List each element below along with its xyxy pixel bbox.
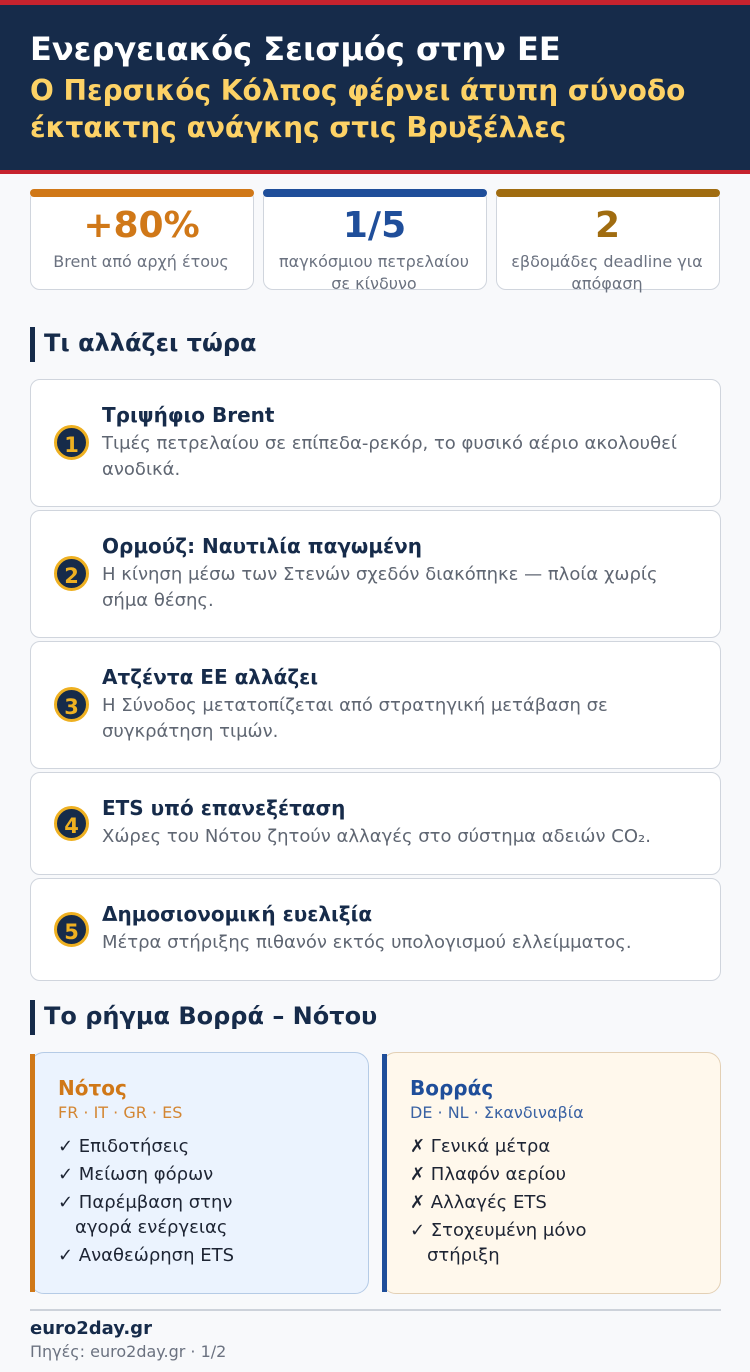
North list (410, 1136, 586, 1266)
icon: number 1: 1 (64, 433, 79, 457)
stat card: global oil: παγκόσμιου πετρελαίου (279, 252, 469, 271)
panel: South (30, 1052, 369, 1294)
step 5 heading: Δημοσιονομική ευελιξία (102, 902, 372, 926)
stat card: Brent: Brent από αρχή έτους (53, 252, 229, 271)
step 1 (30, 379, 721, 507)
North heading: Βορράς (410, 1076, 493, 1100)
icon: number 2 (54, 556, 89, 591)
stat card: global oil (263, 189, 487, 290)
icon: number 5: 5 (64, 920, 79, 944)
footer brand: euro2day.gr (30, 1318, 152, 1339)
icon: number 4: 4 (64, 814, 79, 838)
South heading: Νότος (58, 1076, 127, 1100)
step 5 text: Μέτρα στήριξης πιθανόν εκτός υπολογισμού ελλείμματος. (102, 932, 632, 953)
South list: ✓ Παρέμβαση στην (58, 1192, 232, 1213)
subtitle: Ο Περσικός Κόλπος φέρνει άτυπη σύνοδο (30, 74, 685, 107)
stat card: deadline: απόφαση (571, 274, 643, 293)
stat card: deadline: εβδομάδες deadline για (511, 252, 703, 271)
icon: number 1 (54, 425, 89, 460)
step 4 heading: ETS υπό επανεξέταση (102, 796, 345, 820)
step 1 heading: Τριψήφιο Brent (102, 403, 274, 427)
step 4 text: Χώρες του Νότου ζητούν αλλαγές στο σύστημα αδειών CO₂. (102, 826, 651, 847)
panel: North (382, 1052, 721, 1294)
step 2 heading: Ορμούζ: Ναυτιλία παγωμένη (102, 534, 422, 558)
icon: number 4 (54, 806, 89, 841)
North list: στήριξη (427, 1245, 500, 1266)
South countries: FR · IT · GR · ES (58, 1103, 182, 1122)
step 3 text (102, 695, 608, 742)
step 3 heading: Ατζέντα ΕΕ αλλάζει (102, 665, 318, 689)
North list: ✓ Στοχευμένη μόνο (410, 1220, 586, 1241)
section heading: north-south rift: Το ρήγμα Βορρά – Νότου (44, 1002, 377, 1030)
step 1 text: Τιμές πετρελαίου σε επίπεδα-ρεκόρ, το φυσικό αέριο ακολουθεί (102, 433, 677, 454)
subtitle: έκτακτης ανάγκης στις Βρυξέλλες (30, 111, 566, 144)
step 2 (30, 510, 721, 638)
South list: αγορά ενέργειας (75, 1217, 227, 1238)
step 4 (30, 772, 721, 875)
icon: number 3: 3 (64, 695, 79, 719)
South list: ✓ Επιδοτήσεις (58, 1136, 189, 1157)
footer (30, 1318, 226, 1361)
step 2 text: Η κίνηση μέσω των Στενών σχεδόν διακόπηκε — πλοία χωρίς (102, 564, 658, 585)
step 3 (30, 641, 721, 769)
step 2 text (102, 564, 658, 611)
South list: ✓ Αναθεώρηση ETS (58, 1245, 234, 1266)
stat card: deadline: 2 (595, 205, 620, 246)
icon: number 2: 2 (64, 564, 79, 588)
North list: ✗ Αλλαγές ETS (410, 1192, 547, 1213)
icon: number 5 (54, 912, 89, 947)
stat card: Brent (30, 189, 254, 290)
stat card: global oil: σε κίνδυνο (331, 274, 417, 293)
section heading: what changes (30, 327, 430, 362)
title: Ενεργειακός Σεισμός στην ΕΕ (30, 30, 561, 68)
step 2 text: σήμα θέσης. (102, 590, 214, 611)
stat card: global oil: 1/5 (343, 205, 406, 246)
section heading: what changes: Τι αλλάζει τώρα (44, 329, 257, 357)
step 1 text (102, 433, 677, 480)
section heading: north-south rift (30, 1000, 430, 1035)
North list: ✗ Πλαφόν αερίου (410, 1164, 566, 1185)
stat card: Brent: +80% (83, 205, 200, 246)
step 3 text: συγκράτηση τιμών. (102, 721, 278, 742)
South list (58, 1136, 234, 1266)
North countries: DE · NL · Σκανδιναβία (410, 1103, 584, 1122)
step 1 text: ανοδικά. (102, 459, 180, 480)
step 5 (30, 878, 721, 981)
South list: ✓ Μείωση φόρων (58, 1164, 213, 1185)
stat card: deadline (496, 189, 720, 290)
subtitle (30, 74, 685, 144)
North list: ✗ Γενικά μέτρα (410, 1136, 550, 1157)
step 3 text: Η Σύνοδος μετατοπίζεται από στρατηγική μετάβαση σε (102, 695, 608, 716)
footer sources: Πηγές: euro2day.gr · 1/2 (30, 1342, 226, 1361)
icon: number 3 (54, 687, 89, 722)
header (0, 0, 750, 174)
